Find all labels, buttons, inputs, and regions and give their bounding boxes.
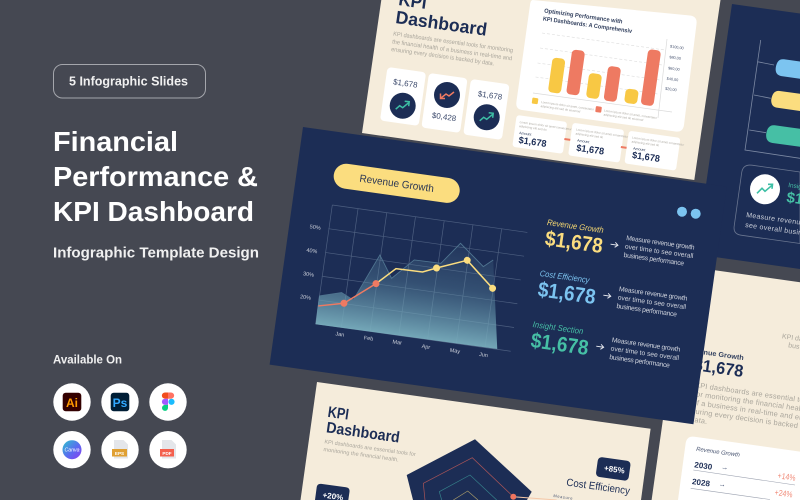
slide heading: Dashboard xyxy=(394,7,488,40)
amount card 2: Lorem ipsum dolor sit amet consectetur xyxy=(576,128,628,139)
amount card 3: Amount xyxy=(633,147,646,152)
icon: EPS file xyxy=(101,431,139,468)
available on label: Available On xyxy=(53,354,122,366)
growth table card: → xyxy=(721,464,729,472)
subtitle: Infographic Template Design xyxy=(53,244,259,262)
stat block xyxy=(686,347,745,381)
amount card 3 xyxy=(624,131,684,171)
x axis labels: Jun xyxy=(479,352,488,359)
y axis labels xyxy=(300,224,321,302)
x axis labels: Feb xyxy=(363,335,374,343)
stat: insight section: Insight Section xyxy=(532,319,584,336)
title: Performance & xyxy=(53,161,258,192)
panel: right navy slide xyxy=(696,4,800,269)
stat: insight section xyxy=(529,319,682,373)
chart legend: adipiscing elit sed do eiusmod xyxy=(540,104,581,114)
connector dash xyxy=(564,138,571,141)
revenue growth pill xyxy=(332,162,461,205)
stat: cost efficiency: Cost Efficiency xyxy=(539,268,591,285)
chart legend xyxy=(532,98,657,122)
bar chart xyxy=(548,49,661,106)
stat: cost efficiency: business performance xyxy=(616,303,678,319)
growth table card: 2030 xyxy=(694,460,713,472)
amount card 3: Lorem ipsum dolor sit amet consectetur xyxy=(632,136,684,147)
panel: lower right cream slide xyxy=(652,266,800,500)
icon: Figma xyxy=(149,383,187,421)
amount card 3: $1,678 xyxy=(631,150,661,165)
badge: +20% xyxy=(315,484,350,500)
growth table card: 2028 xyxy=(691,477,711,489)
chart legend: adipiscing elit sed do eiusmod xyxy=(603,113,644,122)
x axis labels xyxy=(335,331,488,359)
description: the financial health of a business in real-time and xyxy=(392,40,512,62)
amount card 1 xyxy=(512,115,572,154)
chart card xyxy=(516,0,697,132)
description xyxy=(391,32,513,67)
KPI card 1 xyxy=(380,67,426,126)
slide heading: KPI xyxy=(327,404,350,424)
panel: main navy revenue growth slide xyxy=(270,127,727,424)
axis labels: $100,00 xyxy=(670,45,684,50)
stat: insight section: $1,678 xyxy=(529,329,590,360)
growth table card: +14% xyxy=(777,470,797,483)
stat: revenue growth: $1,678 xyxy=(544,227,605,258)
KPI card 2 xyxy=(421,73,468,133)
stat: cost efficiency: Measure revenue growth xyxy=(619,286,688,303)
description: data. xyxy=(690,415,708,426)
stat block: $1,678 xyxy=(692,355,745,381)
title xyxy=(53,126,258,227)
description: monitoring the financial health. xyxy=(323,447,400,464)
y axis labels: 20% xyxy=(300,294,311,302)
chart legend: Lorem ipsum dolor sit amet, consectetur xyxy=(541,100,594,111)
growth table card: Revenue Growth xyxy=(696,447,741,459)
line chart xyxy=(315,205,527,352)
stat: insight section: Measure revenue growth xyxy=(611,337,681,354)
axis labels: $20,00 xyxy=(665,87,677,92)
y axis labels: 30% xyxy=(303,271,314,279)
slide heading: Dashboard xyxy=(325,419,401,447)
top-right description: bus xyxy=(788,342,800,351)
stat: cost efficiency: $1,678 xyxy=(536,278,597,309)
description: KPI dashboards are essential tools for monitoring xyxy=(393,32,513,54)
icon: Adobe Illustrator xyxy=(53,383,91,421)
icon: Adobe Illustrator: Ai xyxy=(66,396,78,410)
insight card xyxy=(734,165,800,244)
slide heading xyxy=(325,404,401,447)
axis labels: $80,00 xyxy=(669,55,681,61)
icon: PDF file: PDF xyxy=(162,451,172,456)
amount card 2 xyxy=(568,123,628,163)
horizontal bar chart xyxy=(745,40,800,158)
chart card: KPI Dashboards: A Comprehensiv xyxy=(542,17,633,35)
description: KPI dashboards are essential tools for xyxy=(324,439,416,458)
x axis labels: Mar xyxy=(392,339,402,347)
connector dash xyxy=(621,146,628,149)
x axis labels: Apr xyxy=(421,344,431,351)
stat: cost efficiency: over time to see overall xyxy=(617,295,687,311)
axis labels: $40,00 xyxy=(666,77,678,82)
stat: cost efficiency xyxy=(536,268,689,322)
icon: EPS file: EPS xyxy=(115,451,124,456)
x axis labels: May xyxy=(449,348,461,355)
growth table card xyxy=(678,437,800,500)
chart card: Optimizing Performance with xyxy=(544,9,623,26)
stat: revenue growth: Revenue Growth xyxy=(546,217,604,235)
amount card 3: adipiscing elit sed do xyxy=(631,140,660,147)
chart legend: Lorem ipsum dolor sit amet, consectetur xyxy=(604,109,657,120)
badge: 5 infographic slides xyxy=(54,64,206,98)
KPI card 3 xyxy=(463,79,510,140)
stat: revenue growth: over time to see overall xyxy=(624,244,694,260)
amount card 1: Lorem ipsum dolor sit amet consectetur xyxy=(519,120,572,131)
growth table card: +24% xyxy=(774,487,794,500)
x axis labels: Jan xyxy=(335,331,345,339)
amount card 2: Amount xyxy=(577,139,590,144)
amount card 1: adipiscing elit sed do xyxy=(519,124,547,132)
cost efficiency heading: Cost Efficiency xyxy=(566,477,631,497)
stat: insight section: business performance xyxy=(609,354,670,370)
amount card 2: $1,678 xyxy=(576,143,605,158)
amount card 2: adipiscing elit sed do xyxy=(575,132,604,139)
KPI card 1: $1,678 xyxy=(393,77,419,90)
decorative dots xyxy=(677,207,701,219)
KPI card 3: $1,678 xyxy=(477,89,503,102)
y axis labels: 50% xyxy=(309,224,321,232)
stat: revenue growth xyxy=(543,217,696,271)
icon: Canva: Canva xyxy=(64,448,80,454)
stat block: Revenue Growth xyxy=(686,347,744,362)
top-right description xyxy=(781,333,800,351)
panel: top cream KPI dashboard slide xyxy=(362,0,720,180)
icon: Adobe Photoshop: Ps xyxy=(113,396,128,410)
stat: revenue growth: Measure revenue growth xyxy=(626,235,695,252)
title: Financial xyxy=(53,126,178,157)
KPI card 2: $0,428 xyxy=(431,111,457,123)
amount card 1: Amount xyxy=(519,131,532,137)
y axis labels: 40% xyxy=(306,248,318,255)
badge: +85% xyxy=(596,457,631,481)
revenue growth pill: Revenue Growth xyxy=(359,173,435,195)
icon: PDF file xyxy=(149,431,187,468)
growth table card: → xyxy=(718,481,726,489)
description: ensuring every decision is backed by data. xyxy=(391,47,495,67)
axis labels: $60,00 xyxy=(668,66,680,72)
badge: 5 infographic slides: 5 Infographic Slides xyxy=(69,74,188,88)
axis labels xyxy=(665,45,684,92)
badge: +85%: +85% xyxy=(603,464,625,475)
panel: bottom cream radar slide xyxy=(300,382,651,500)
radar chart xyxy=(407,439,557,500)
title: KPI Dashboard xyxy=(53,196,254,227)
stat: revenue growth: business performance xyxy=(623,252,685,268)
amount card 1: $1,678 xyxy=(518,135,547,150)
description xyxy=(690,380,800,431)
description: for monitoring the financial heal xyxy=(693,389,800,413)
icon: Adobe Photoshop xyxy=(101,383,139,421)
stat: insight section: over time to see overall xyxy=(610,346,680,362)
icon: Canva xyxy=(53,431,91,468)
